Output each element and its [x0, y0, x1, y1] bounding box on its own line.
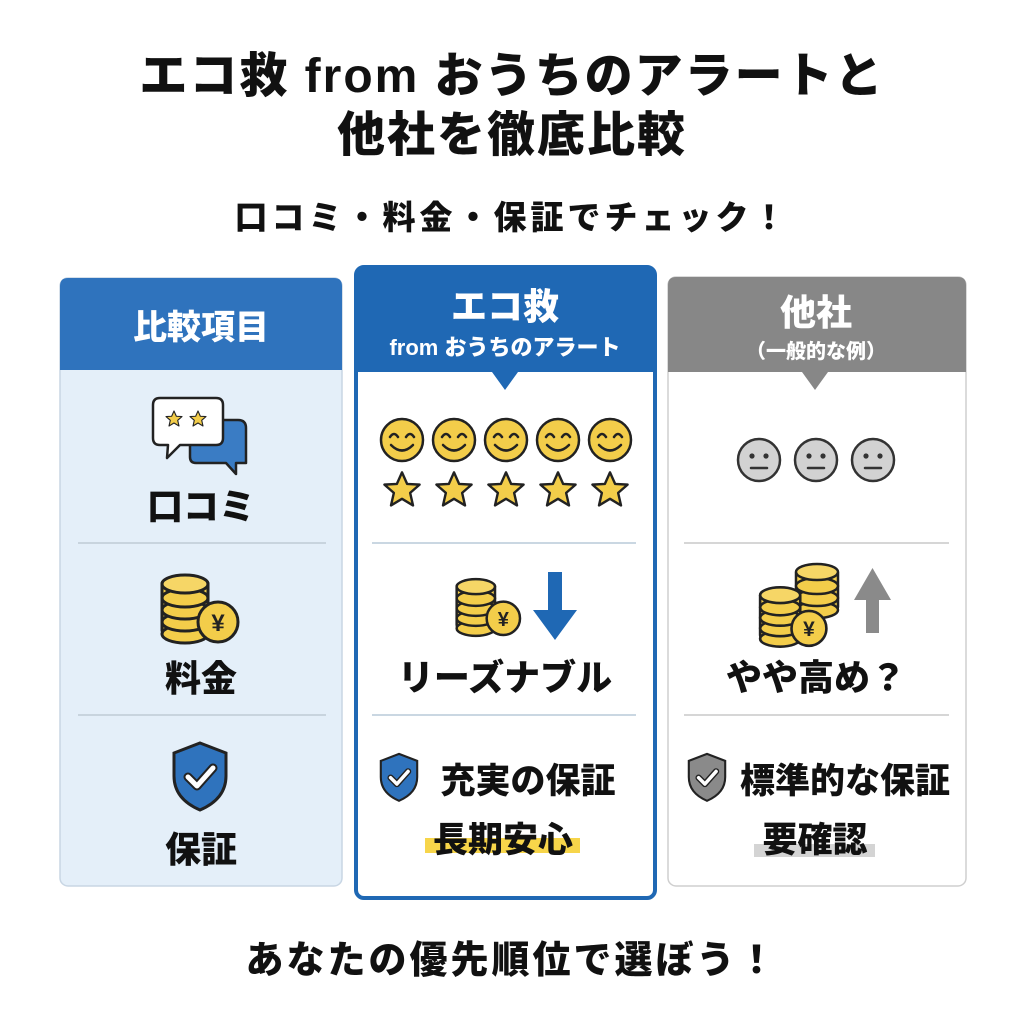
highlight: 要確認: 要確認	[762, 821, 868, 860]
label: 保証: 保証	[165, 829, 237, 870]
rating: smiley faces and stars	[381, 419, 631, 505]
label: 口コミ: 口コミ	[147, 486, 255, 527]
label: 料金: 料金	[165, 658, 237, 699]
subtitle: 口コミ・料金・保証でチェック！	[234, 199, 790, 236]
panel: エコ救	[356, 267, 655, 898]
title	[139, 50, 885, 162]
heading: 他社（一般的な例）	[746, 292, 886, 363]
highlight: 長期安心: 長期安心	[433, 821, 573, 860]
heading: 他社（一般的な例）: 他社	[780, 292, 852, 333]
heading: エコ救 from おうちのアラート: エコ救	[451, 286, 559, 327]
heading: 他社（一般的な例）: （一般的な例）	[746, 340, 886, 363]
icon: coins	[162, 575, 238, 643]
label: リーズナブル: リーズナブル	[398, 657, 612, 698]
label: やや高め？: やや高め？	[726, 657, 906, 698]
heading: 比較項目: 比較項目	[133, 309, 269, 347]
panel: comparison items	[60, 278, 342, 886]
heading: エコ救 from おうちのアラート: from おうちのアラート	[389, 335, 621, 360]
guarantee: 充実の保証: 充実の保証	[440, 762, 616, 801]
icon: review speech bubbles	[153, 398, 246, 474]
icon: shield	[174, 743, 226, 810]
title: エコ救 from おうちのアラートと	[139, 50, 885, 103]
icon: coins with up arrow	[760, 564, 891, 647]
footer message: あなたの優先順位で選ぼう！	[245, 940, 779, 982]
panel: 他社	[668, 277, 966, 886]
title: 他社を徹底比較	[337, 109, 687, 162]
icon: coins with down arrow	[457, 572, 577, 640]
heading: エコ救 from おうちのアラート	[389, 286, 621, 360]
guarantee: 充実の保証	[381, 754, 616, 801]
guarantee: 標準的な保証	[689, 754, 950, 801]
rating: neutral faces	[738, 439, 894, 481]
guarantee: 標準的な保証: 標準的な保証	[740, 762, 950, 801]
